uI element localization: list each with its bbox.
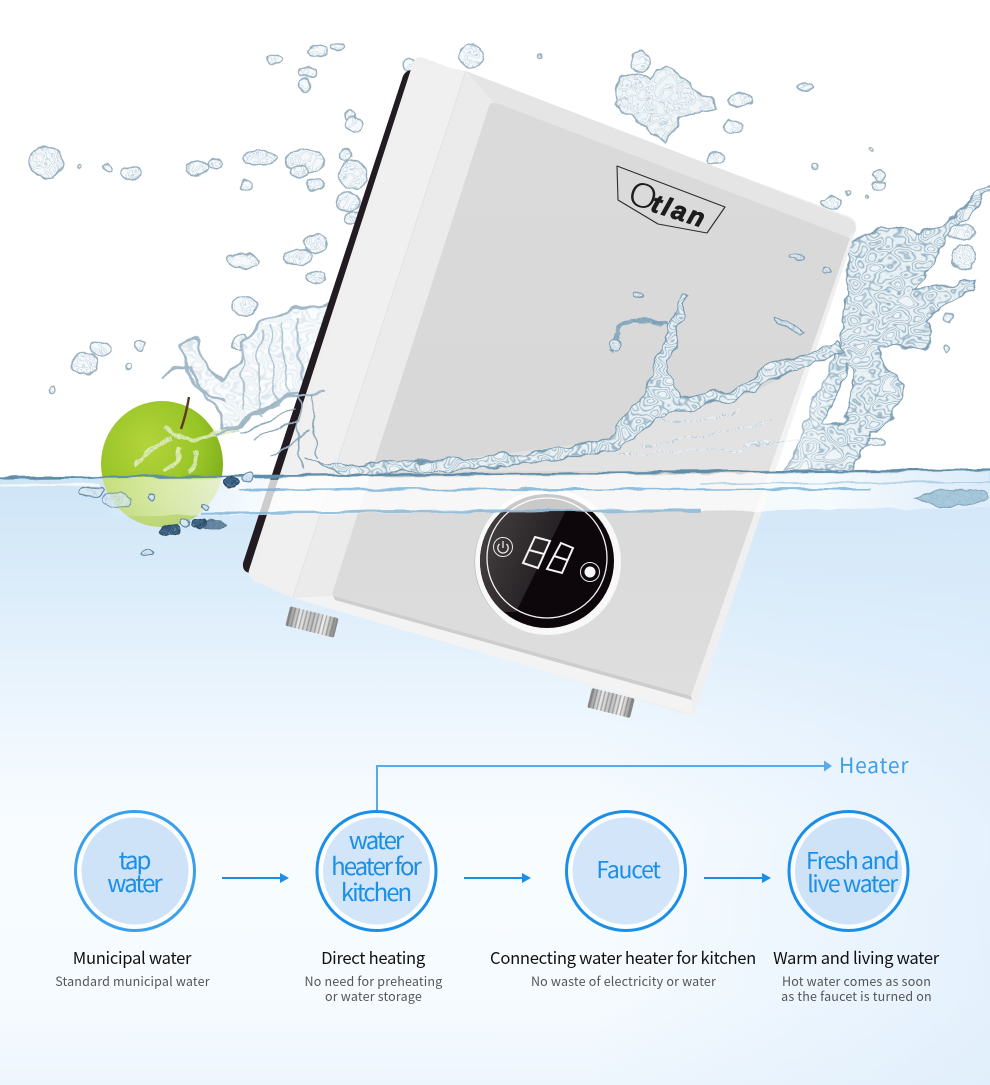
circle 1: [76, 812, 194, 930]
flying water droplets top and right: [460, 44, 976, 446]
circle 2: water: [349, 821, 405, 856]
heater appliance: [243, 57, 856, 718]
circle 1: water: [107, 864, 163, 899]
top bevel: [466, 71, 856, 238]
splash behind heater: left crown: [181, 298, 337, 430]
circle 2: heater for: [331, 847, 423, 882]
bevel line: [293, 71, 466, 598]
splash around apple: [160, 366, 325, 470]
splash behind heater: right main: [785, 185, 990, 470]
circle 2: kitchen: [341, 873, 410, 908]
flying water droplets left: [29, 43, 416, 393]
pipe fitting right: [587, 688, 635, 718]
face lower shade: [333, 596, 692, 700]
left band: [293, 71, 495, 598]
step 1 caption: Standard municipal water: [55, 971, 210, 990]
underwater bubbles: [80, 472, 988, 556]
arrow 3: [704, 873, 771, 883]
left bevel: [253, 62, 466, 598]
arrow 1: [222, 873, 289, 883]
step 3: faucet: [490, 812, 756, 990]
circle 3: [566, 812, 686, 930]
droplets on heater face: [609, 254, 831, 351]
apple: [101, 397, 240, 527]
temperature digits: [523, 537, 573, 573]
heater back edge: [243, 70, 412, 573]
crest body over heater: [350, 350, 835, 472]
circle 4: [789, 812, 908, 930]
step 2 caption: No need for preheating: [305, 971, 442, 990]
step 1: tap water: [55, 812, 210, 990]
logo badge: [617, 166, 725, 236]
mode button: [580, 562, 600, 582]
connector line to heater label: [377, 760, 832, 811]
circle 4: Fresh and: [806, 842, 898, 876]
arrow 2: [464, 873, 531, 883]
step 2 caption: [305, 945, 442, 1005]
circle 1: tap: [119, 841, 151, 876]
heater label: Heater: [839, 750, 909, 780]
step 4: fresh and live water: [773, 812, 940, 1005]
water surface: [0, 470, 990, 516]
step 4 caption: Hot water comes as soon: [782, 971, 931, 990]
step 2 caption: or water storage: [325, 986, 422, 1005]
submerged apple tint: [102, 477, 222, 527]
step 3 caption: [490, 945, 756, 990]
step 2: water heater for kitchen: [305, 812, 442, 1005]
logo wordmark: Otlan: [624, 172, 714, 236]
heater shell: [249, 57, 856, 716]
step 3 caption: No waste of electricity or water: [531, 971, 716, 990]
pipe fitting left: [285, 606, 339, 638]
step 1 caption: [55, 945, 210, 990]
step 1 caption: Municipal water: [73, 945, 192, 969]
splash behind heater: top centre: [616, 66, 716, 143]
control panel: [470, 489, 621, 635]
circle 2: [317, 812, 436, 930]
step 3 caption: Connecting water heater for kitchen: [490, 945, 756, 969]
front face: [333, 103, 850, 696]
step 2 caption: Direct heating: [321, 945, 426, 969]
step 4 caption: [773, 945, 940, 1005]
step 4 caption: as the faucet is turned on: [781, 986, 932, 1005]
circle 3: Faucet: [596, 851, 661, 885]
water crest over heater: [305, 296, 845, 476]
step 4 caption: Warm and living water: [773, 945, 940, 969]
background: water body: [0, 470, 990, 1085]
power button: [494, 538, 512, 556]
splash over apple: [135, 425, 240, 472]
circle 4: live water: [807, 865, 898, 899]
bottom lip: [293, 596, 693, 714]
